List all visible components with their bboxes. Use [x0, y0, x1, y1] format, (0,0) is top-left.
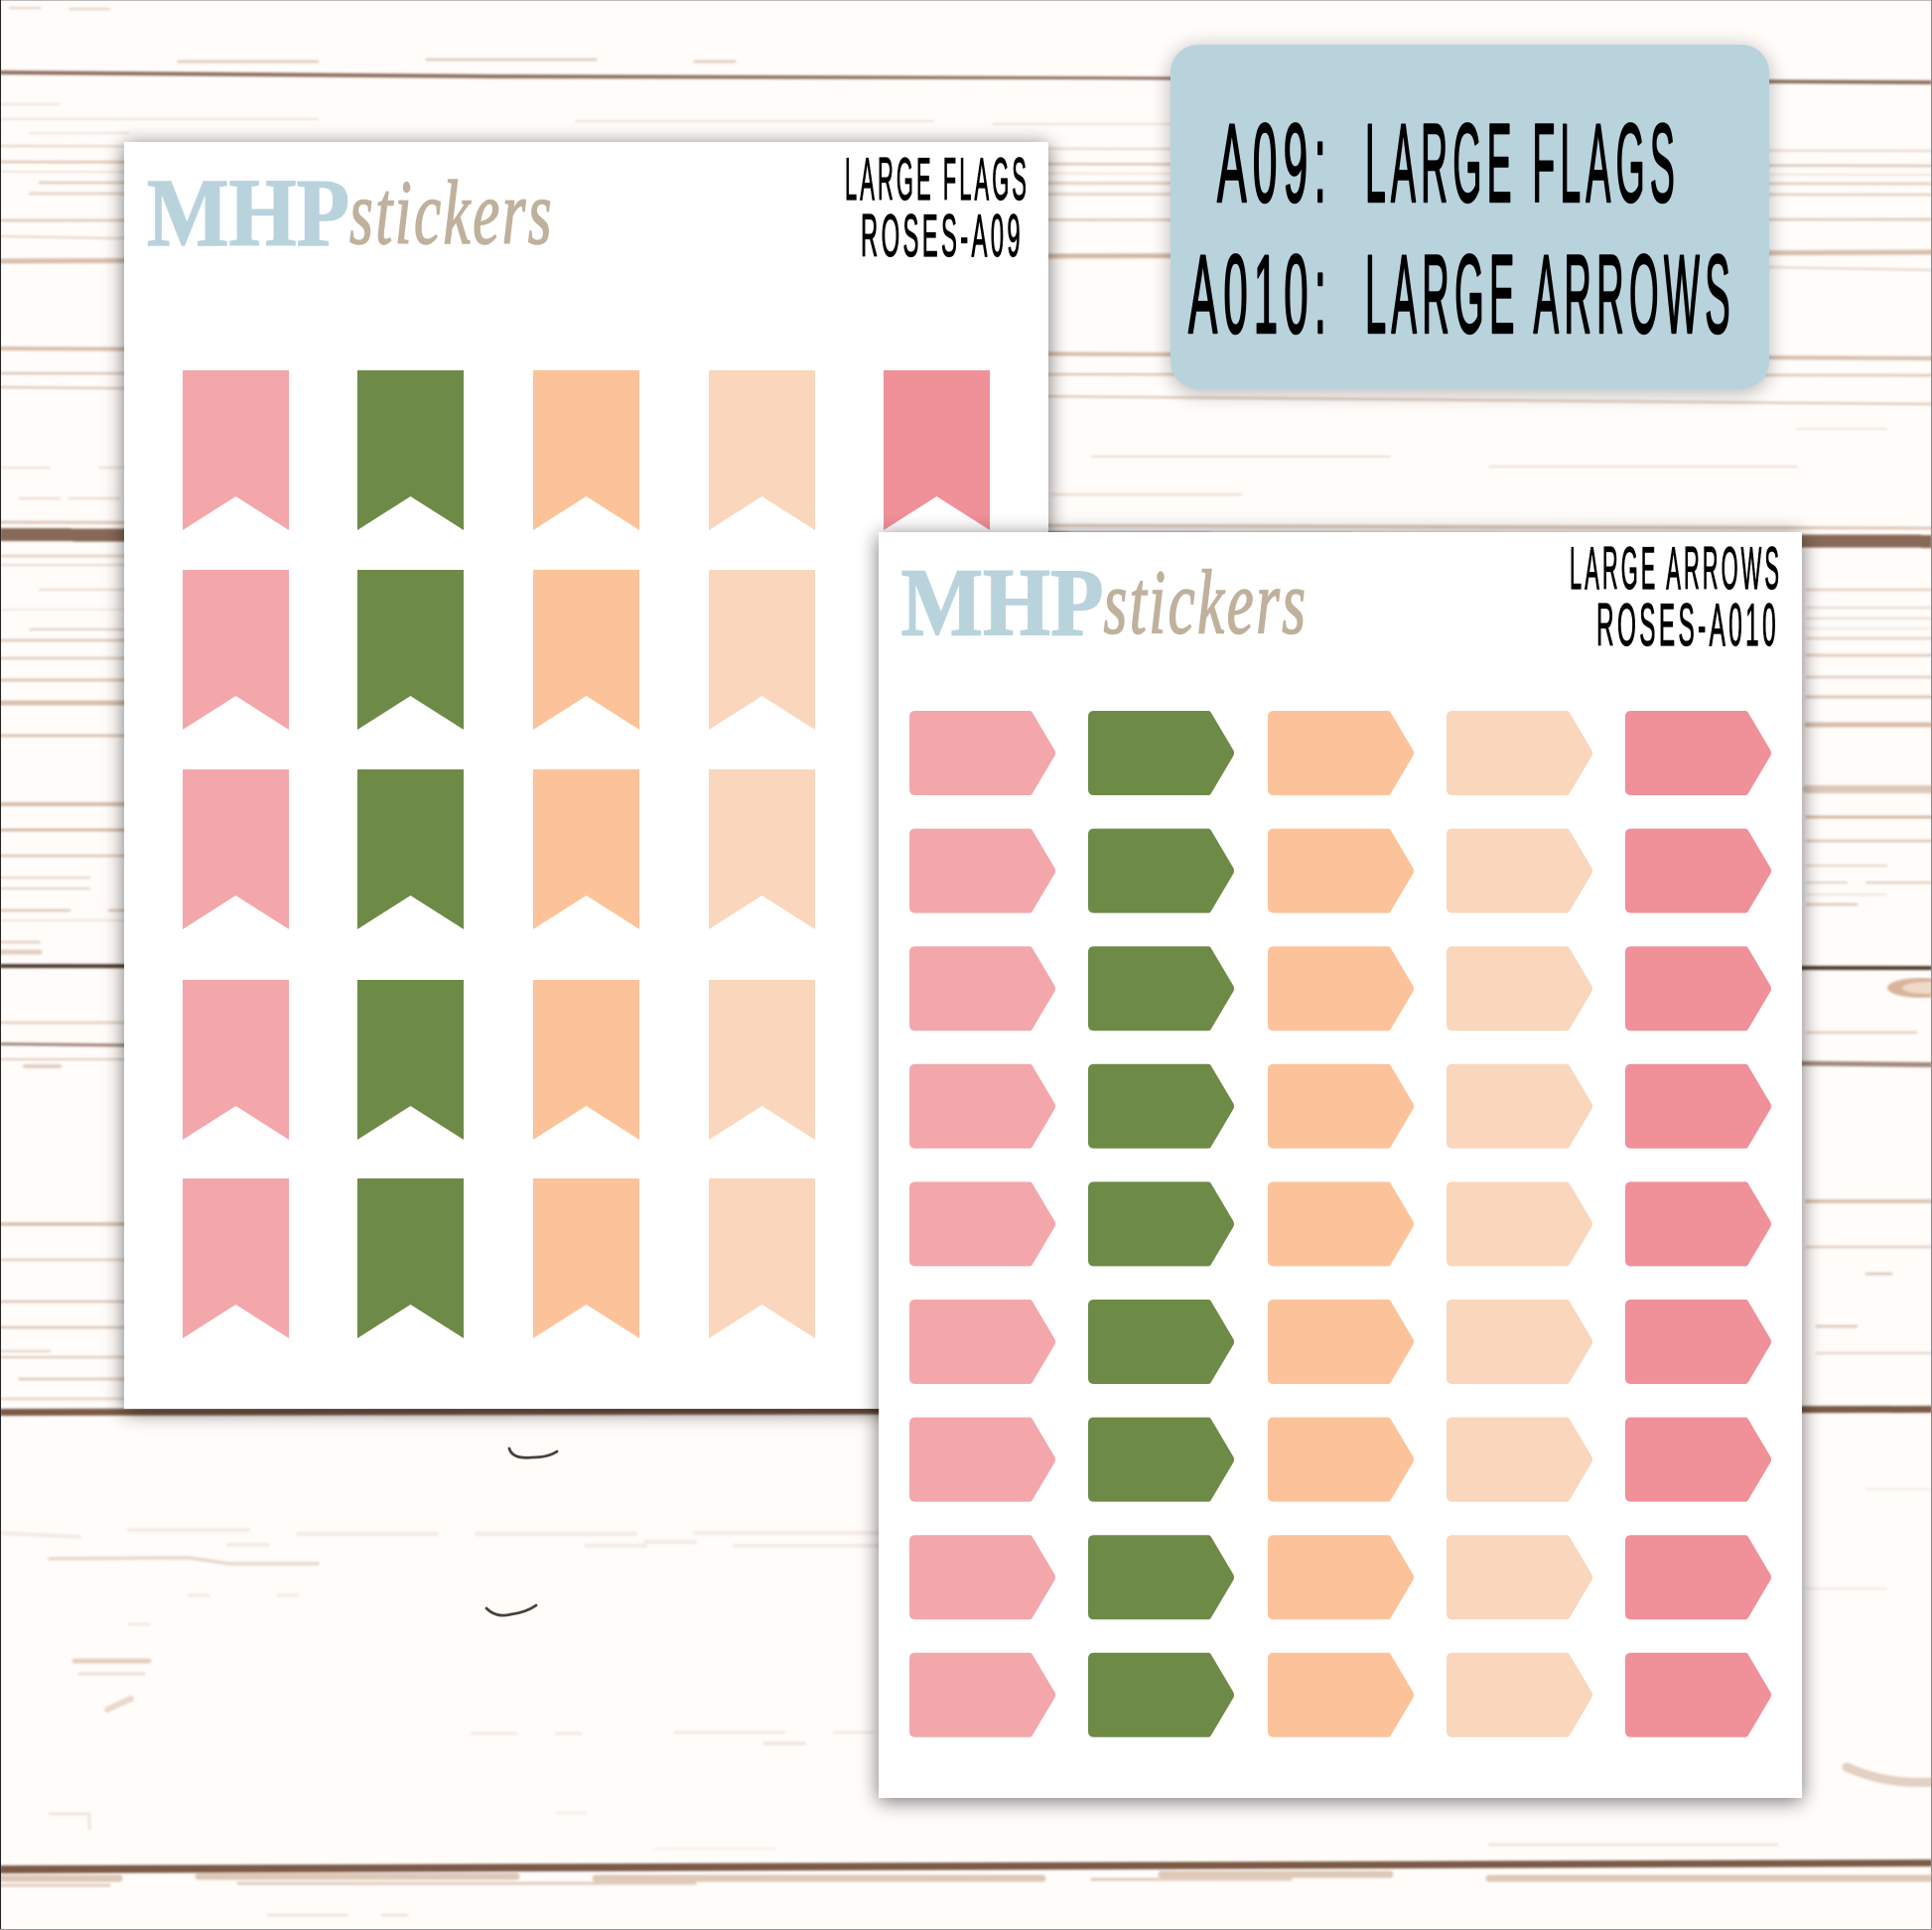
sheet title: large flags [845, 146, 1030, 269]
text: LARGE FLAGS [845, 146, 1030, 212]
arrow stickers: green column [1088, 711, 1234, 1737]
arrow stickers: peach column [1447, 711, 1592, 1737]
flag stickers: peach column [709, 370, 815, 1338]
line: A010 large arrows: A010: [1188, 232, 1332, 356]
flag stickers: orange column [533, 370, 639, 1338]
flag sticker: rose [884, 370, 990, 530]
small dark wood marks [486, 1448, 557, 1615]
wood knot [1887, 978, 1932, 998]
line: A09 large flags: A09: [1217, 101, 1332, 225]
sheet title: large arrows [1570, 535, 1782, 658]
logo: MHP stickers [901, 550, 1309, 657]
arrow stickers: pink column [909, 711, 1055, 1737]
text: ROSES-A09 [861, 203, 1024, 269]
flag stickers: pink column [183, 370, 289, 1338]
logo: MHP stickers: stickers [349, 162, 554, 263]
arrow stickers: orange column [1268, 711, 1414, 1737]
arrow stickers: rose column [1625, 711, 1771, 1737]
flag stickers: green column [357, 370, 464, 1338]
logo: MHP stickers: MHP [901, 550, 1104, 657]
line: A09 large flags [1217, 101, 1680, 225]
callout: product code key [1171, 45, 1769, 393]
logo: MHP stickers: MHP [147, 160, 349, 267]
logo: MHP stickers: stickers [1104, 552, 1309, 653]
panel: large flags sticker sheet [124, 142, 1048, 1412]
line: A010 large arrows [1188, 232, 1735, 356]
logo: MHP stickers [147, 160, 554, 267]
panel: large arrows sticker sheet [879, 532, 1802, 1801]
